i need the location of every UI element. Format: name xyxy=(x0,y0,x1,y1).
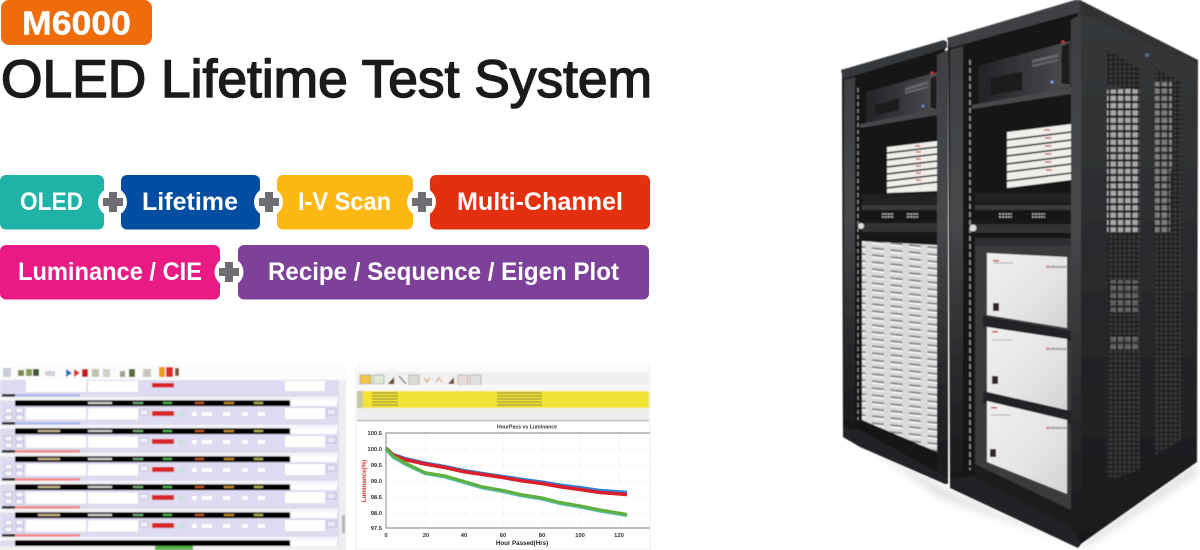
right rack top cap xyxy=(947,0,1081,48)
right frame posts xyxy=(950,14,1081,543)
right rack xyxy=(947,0,1198,548)
scrollbar xyxy=(339,380,346,550)
y axis labels: 99.0 xyxy=(371,479,382,485)
x axis labels: 40 xyxy=(461,533,467,539)
left rack top cap xyxy=(841,40,947,79)
screenshot: multi-channel software xyxy=(0,365,346,550)
tag: Multi-Channel xyxy=(430,175,650,230)
left rack controls shelf xyxy=(858,194,937,232)
left rack server xyxy=(860,71,937,128)
series: blue xyxy=(386,448,627,492)
x axis labels xyxy=(384,533,624,539)
right rack front body xyxy=(948,2,1080,544)
icon: plus 3 xyxy=(407,188,436,216)
tag: Luminance / CIE: Luminance / CIE xyxy=(18,258,202,286)
icon: plus 1 xyxy=(98,188,127,216)
x axis labels: 60 xyxy=(500,533,506,539)
y axis labels xyxy=(367,431,383,532)
y axis labels: 100.0 xyxy=(367,447,382,453)
x axis labels: 120 xyxy=(614,533,624,539)
tag: Recipe / Sequence / Eigen Plot xyxy=(238,245,649,300)
equipment: twin test racks xyxy=(841,0,1198,548)
y axis labels: 100.5 xyxy=(367,431,383,437)
series: cyan xyxy=(386,449,627,516)
test module 2: McScience xyxy=(1046,346,1067,351)
icon: plus 2 xyxy=(254,188,283,216)
test module 3 xyxy=(987,401,1067,494)
model badge: M6000 xyxy=(22,4,131,42)
tag: OLED: OLED xyxy=(20,188,83,216)
test module 2 xyxy=(987,327,1067,411)
x axis labels: 100 xyxy=(575,533,585,539)
x axis labels: 0 xyxy=(384,533,388,539)
icon: plus 4 xyxy=(214,258,244,286)
dark divider 1 xyxy=(983,316,1071,341)
series: green xyxy=(386,448,627,514)
ground shadow xyxy=(860,440,1197,548)
x axis title: Hour Passed(Hrs) xyxy=(496,540,548,547)
tag: I-V Scan: I-V Scan xyxy=(298,188,391,216)
tag: Luminance / CIE xyxy=(0,245,220,300)
x axis labels: 80 xyxy=(539,533,545,539)
y axis labels: 98.5 xyxy=(371,495,383,501)
file list xyxy=(357,385,649,421)
tag: Lifetime xyxy=(121,175,260,230)
line chart xyxy=(361,431,650,547)
window toolbar xyxy=(357,366,649,385)
left frame posts xyxy=(844,50,948,484)
left rack base xyxy=(843,427,948,484)
feature tags xyxy=(0,175,650,300)
channel rows xyxy=(0,394,338,546)
right rack controls shelf xyxy=(970,193,1071,246)
title: OLED Lifetime Test System xyxy=(1,50,652,109)
left rack vent panel xyxy=(862,241,937,452)
tag: I-V Scan xyxy=(277,175,413,230)
tag: Multi-Channel: Multi-Channel xyxy=(457,188,623,216)
dark divider 2 xyxy=(983,391,1071,424)
toolbar icons xyxy=(3,367,179,377)
y axis labels: 97.5 xyxy=(371,526,383,532)
tag: OLED xyxy=(0,175,104,230)
x axis labels: 20 xyxy=(423,533,429,539)
channel row 3 xyxy=(0,450,338,476)
status bar xyxy=(0,546,346,550)
test module 3: McScience xyxy=(1046,425,1067,430)
right rack server xyxy=(972,40,1071,109)
test module 1 xyxy=(987,253,1067,328)
left rack display module xyxy=(887,141,937,193)
channel row 4 xyxy=(0,478,338,504)
channel row 1 xyxy=(0,394,338,420)
left rack xyxy=(841,40,948,484)
right rack side xyxy=(1078,0,1198,546)
channel row 6 xyxy=(0,534,338,546)
tag: Recipe / Sequence / Eigen Plot: Recipe / Sequence / Eigen Plot xyxy=(268,258,620,286)
y axis title: Luminance(%) xyxy=(361,460,368,502)
left rack body xyxy=(842,42,948,484)
series: red xyxy=(386,448,627,494)
rack interior surround xyxy=(975,246,1071,527)
right rack lower inner shadow xyxy=(975,464,1071,527)
y axis labels: 99.5 xyxy=(371,463,383,469)
plus connectors xyxy=(98,188,436,286)
screenshot: luminance chart window xyxy=(356,366,650,550)
channel row 5 xyxy=(0,506,338,532)
tag: Lifetime: Lifetime xyxy=(142,188,238,216)
right rack base xyxy=(950,476,1081,548)
right rack display module xyxy=(1007,124,1071,188)
test module 1: McScience xyxy=(1046,264,1067,269)
model badge xyxy=(1,0,152,45)
first settings row xyxy=(26,380,325,392)
chart title: HourPass vs Luminance xyxy=(497,424,558,430)
channel row 2 xyxy=(0,422,338,448)
side mesh xyxy=(1107,50,1181,480)
y axis labels: 98.0 xyxy=(371,511,382,517)
